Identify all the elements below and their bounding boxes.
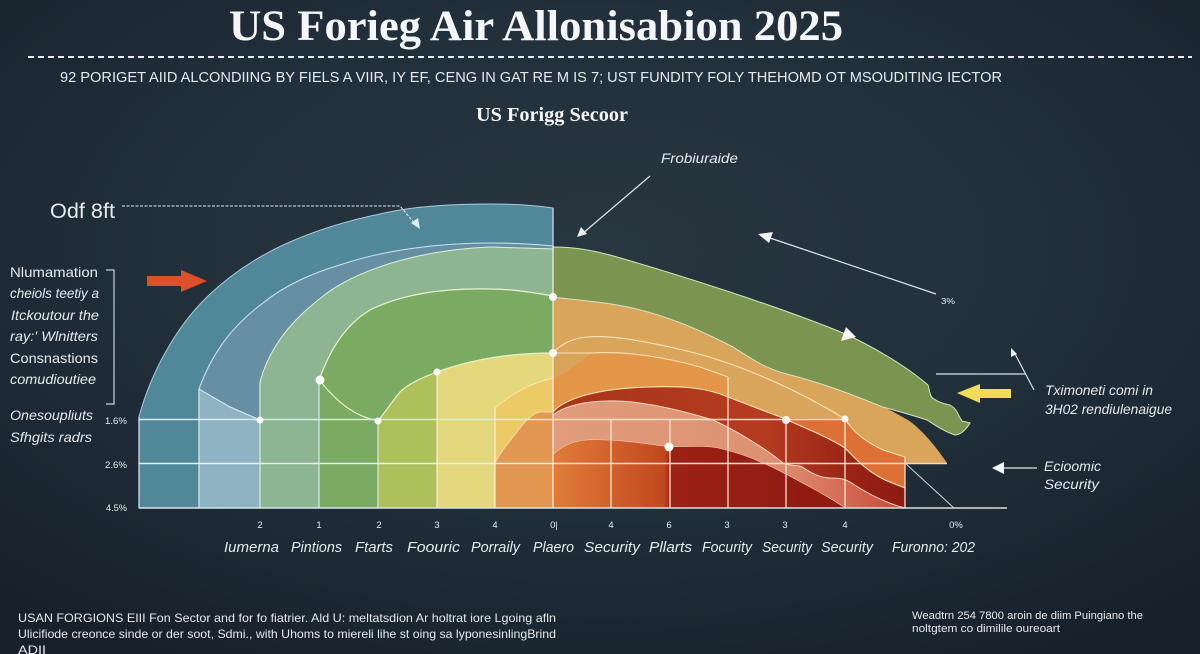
- x axis labels: Focurity: [702, 540, 753, 556]
- footer note left: Ulicifiode creonce sinde or der soot, Sdmi., with Uhoms to miereli lihe st oing sa lyponesinlingBrind: [18, 627, 556, 641]
- left description text: Nlumamation: [10, 264, 98, 280]
- x axis numbers: 0%: [949, 520, 963, 531]
- x axis labels: Furonno: 202: [892, 540, 975, 556]
- y axis labels: 1.6%: [105, 416, 128, 427]
- icon: red arrow: [147, 270, 207, 292]
- band: olive right: [553, 247, 970, 435]
- left description text: Onesoupliuts: [10, 407, 93, 423]
- x axis labels: Security: [584, 540, 641, 556]
- band: light green: [260, 247, 553, 508]
- callout: Tximoned: 3H02 rendiulenaigue: [1045, 401, 1172, 417]
- y axis labels: 4.5%: [106, 503, 128, 514]
- left description text: ray:' Wlnitters: [10, 328, 98, 344]
- callout: Economic Security: Ecioomic: [1044, 458, 1101, 474]
- subtitle: 92 PORIGET AIID ALCONDIING BY FIELS A VIIR, IY EF, CENG IN GAT RE M IS 7; UST FUNDITY FOLY THEHOMD OT MSOUDITING IECTOR: [60, 69, 1002, 86]
- left description text: comudioutiee: [10, 371, 96, 387]
- y axis labels: 2.6%: [105, 460, 128, 471]
- x axis numbers: [257, 520, 963, 531]
- band: orange right: [783, 418, 905, 488]
- x axis numbers: 1: [316, 520, 322, 531]
- x axis numbers: 3: [782, 520, 788, 531]
- x axis numbers: 6: [666, 520, 672, 531]
- band: green: [319, 289, 553, 508]
- data points: [256, 293, 848, 452]
- stacked area chart: [139, 204, 1007, 508]
- title: US Forieg Air Allonisabion 2025: [229, 3, 843, 50]
- x axis numbers: 4: [492, 520, 498, 531]
- x axis labels: Security: [821, 540, 874, 556]
- x axis numbers: 4: [842, 520, 848, 531]
- x axis labels: Pllarts: [649, 540, 692, 556]
- x axis labels: Plaero: [533, 540, 574, 556]
- left description text: cheiols teetiy a: [10, 285, 99, 301]
- band: pale blue: [199, 389, 260, 508]
- left description text: [10, 264, 99, 445]
- band: salmon: [553, 401, 905, 508]
- callout: Tximoned: Tximoneti comi in: [1045, 382, 1153, 398]
- x axis labels: Pintions: [291, 540, 342, 556]
- band: pale yellow: [437, 353, 593, 508]
- callout: Odf 8ft: [50, 200, 420, 229]
- x axis labels: Foouric: [407, 540, 461, 556]
- footer note right: [912, 610, 1143, 635]
- callout: Economic Security: Security: [1044, 476, 1100, 492]
- band: gold right: [553, 297, 947, 463]
- x axis labels: Porraily: [471, 540, 521, 556]
- x axis numbers: 4: [608, 520, 614, 531]
- band: orange centre: [553, 353, 728, 463]
- band: outer blue: [139, 204, 553, 508]
- arrow: 3% pointer: 3%: [941, 296, 955, 306]
- callout: Tximoned: [936, 348, 1172, 417]
- footer note right: Weadtrn 254 7800 aroin de diim Puingiano the: [912, 610, 1143, 622]
- grid lines: [139, 208, 1007, 508]
- band: red: [553, 387, 905, 508]
- icon: yellow arrow: [957, 384, 1011, 403]
- x axis numbers: 0|: [550, 520, 558, 531]
- left description text: Sfhgits radrs: [10, 429, 92, 445]
- y axis labels: [105, 416, 128, 514]
- chart heading: US Forigg Secoor: [476, 104, 628, 126]
- arrow: Frobiuraide pointer: [577, 150, 738, 237]
- arrow: Frobiuraide pointer: Frobiuraide: [661, 150, 738, 166]
- x axis numbers: 2: [376, 520, 382, 531]
- left description text: Consnastions: [10, 350, 98, 366]
- footer note right: noltgtem co dimilile oureoart: [912, 623, 1060, 635]
- callout: Economic Security: [992, 458, 1101, 492]
- callout: Odf 8ft: Odf 8ft: [50, 200, 115, 223]
- x axis numbers: 3: [434, 520, 440, 531]
- band: slate blue: [199, 243, 553, 420]
- x axis labels: [224, 540, 975, 556]
- footer note left: [18, 611, 556, 654]
- icon: white triangle on curve: [841, 327, 856, 341]
- bracket: [106, 270, 114, 404]
- x axis labels: Iumerna: [224, 540, 279, 556]
- band: olive: [378, 372, 437, 508]
- x axis numbers: 3: [724, 520, 730, 531]
- band: yellow: [495, 378, 553, 463]
- x axis labels: Ftarts: [355, 540, 393, 556]
- arrow: 3% pointer: [758, 232, 955, 306]
- x axis labels: Security: [762, 540, 813, 556]
- x axis numbers: 2: [257, 520, 263, 531]
- band: orange left: [495, 412, 553, 508]
- footer note left: USAN FORGIONS EIII Fon Sector and for fo fiatrier. Ald U: meltatsdion Ar holtrat iore Lgoing afln: [18, 611, 556, 625]
- band: dark red base: [553, 440, 845, 508]
- left description text: Itckoutour the: [11, 307, 99, 323]
